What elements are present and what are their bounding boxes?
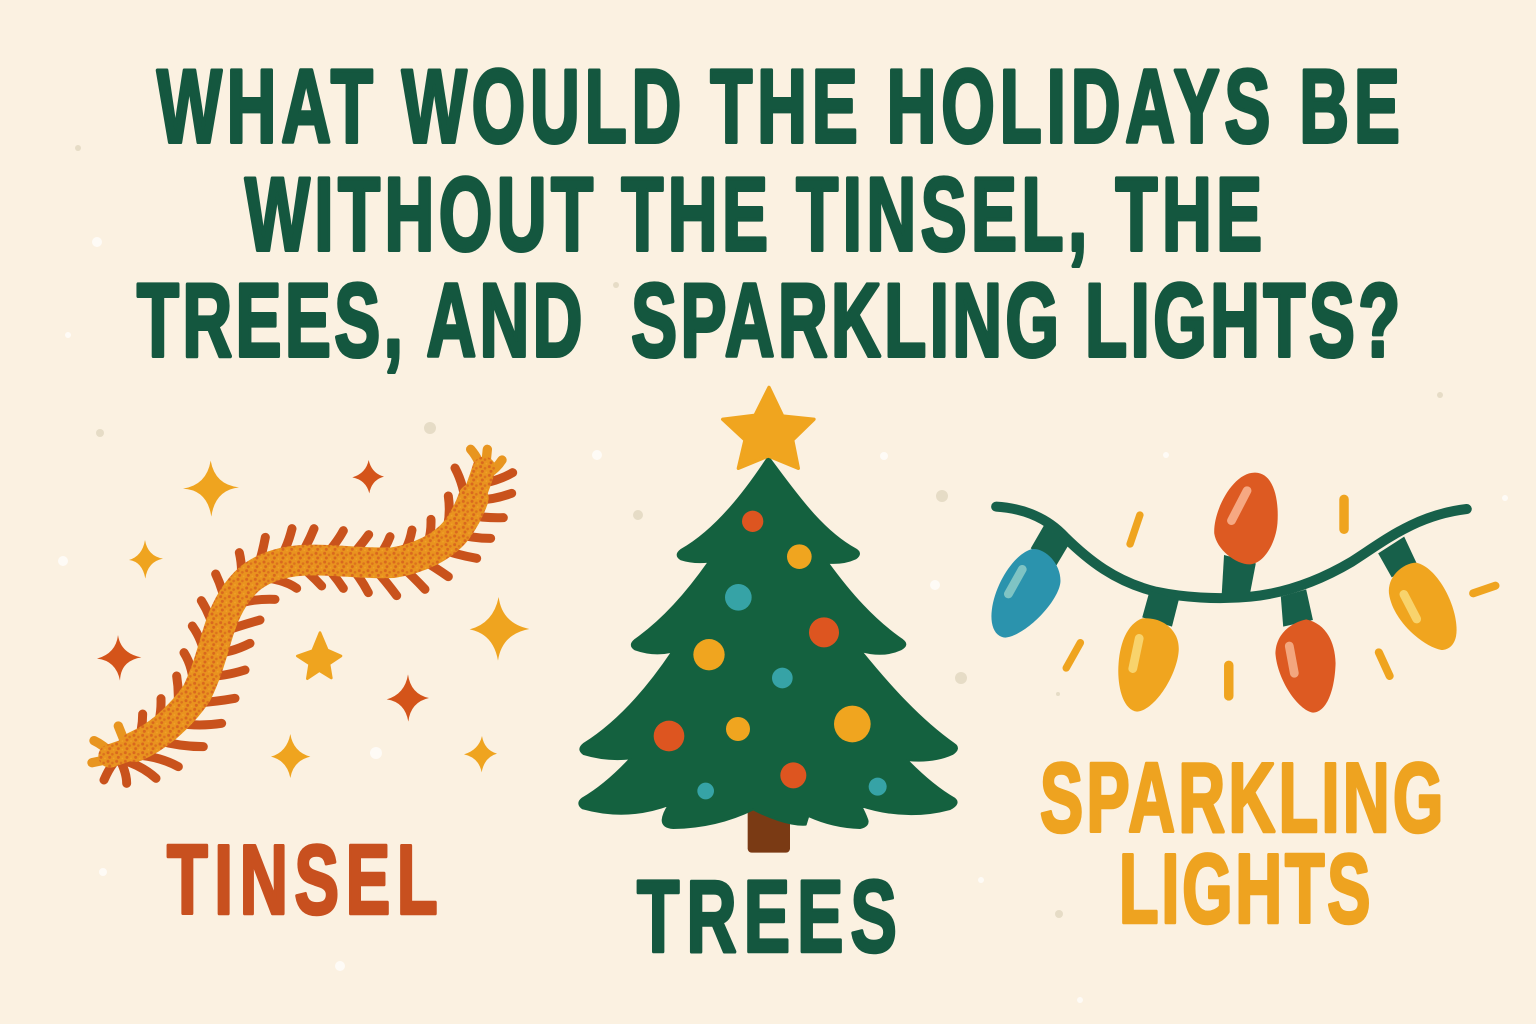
label: trees: TREES [637, 860, 897, 974]
label: sparkling lights: LIGHTS [1119, 834, 1370, 944]
icon: sparkles [97, 460, 529, 778]
panel: sparkling lights [991, 473, 1495, 944]
icon: christmas tree [579, 387, 957, 853]
title [137, 48, 1400, 378]
panel: trees [579, 387, 957, 974]
title: WHAT WOULD THE HOLIDAYS BE [157, 48, 1400, 164]
panel: tinsel [92, 449, 529, 935]
ornaments [654, 511, 887, 799]
icon: tinsel garland [92, 449, 529, 783]
title: WITHOUT THE TINSEL, THE [245, 156, 1262, 272]
label: sparkling lights [1040, 743, 1443, 944]
icon: string of lights [991, 473, 1495, 713]
label: tinsel: TINSEL [167, 825, 438, 935]
light rays [1066, 499, 1495, 696]
icon: star [723, 387, 814, 468]
label: sparkling lights: SPARKLING [1040, 743, 1443, 853]
title: TREES, AND SPARKLING LIGHTS? [137, 262, 1400, 378]
